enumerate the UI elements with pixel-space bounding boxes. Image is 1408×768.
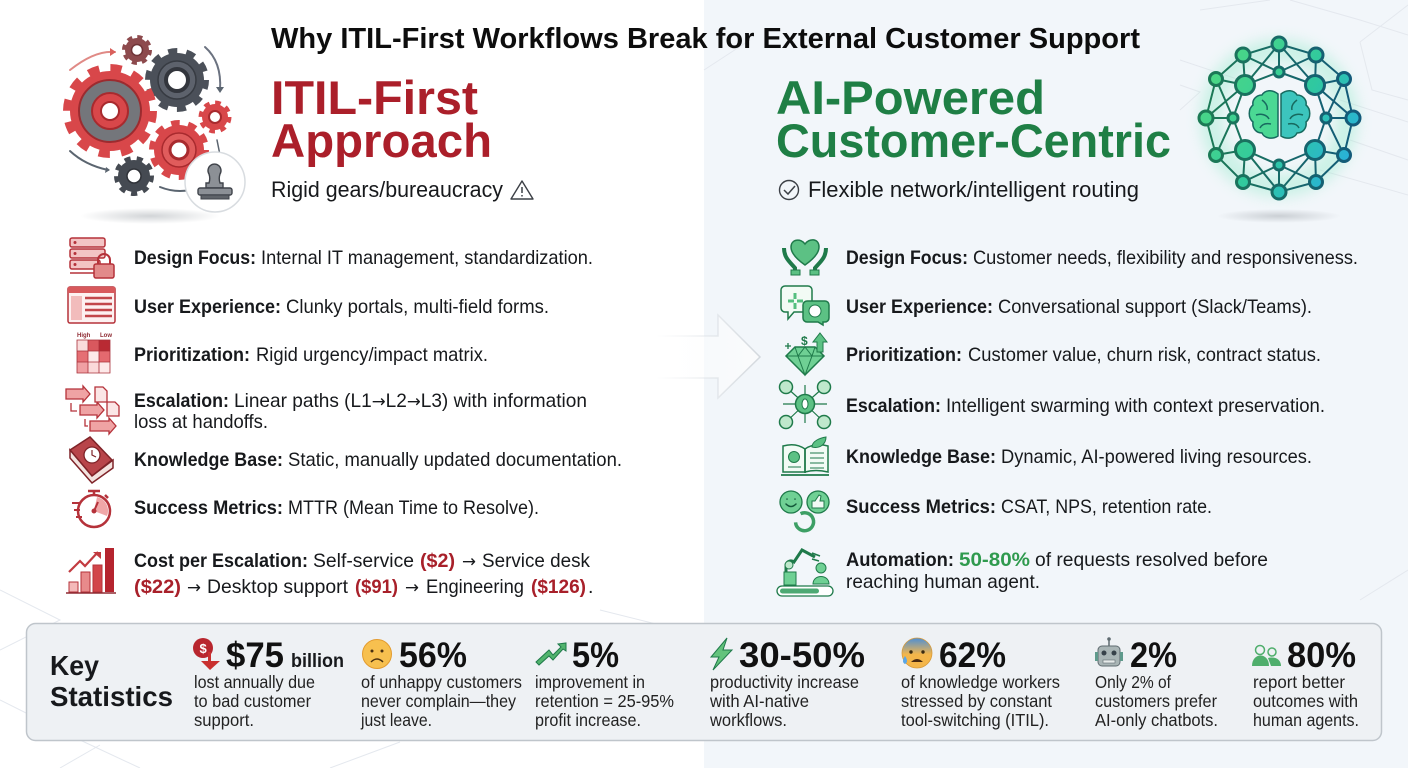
icon: chat bubbles	[781, 286, 829, 325]
text: User Experience:	[846, 296, 993, 318]
stat: 62 percent	[901, 635, 1060, 730]
row: design focus	[70, 238, 593, 278]
arrow: ITIL to AI transition	[655, 315, 760, 398]
description: workflows.	[709, 710, 787, 730]
description: profit increase.	[535, 710, 641, 730]
dark gear	[149, 52, 205, 108]
row: escalation	[66, 386, 587, 434]
brain	[1249, 91, 1310, 138]
text: reaching human agent.	[846, 571, 1040, 593]
text: Dynamic, AI-powered living resources.	[1001, 446, 1312, 468]
text	[134, 247, 593, 269]
row: knowledge base	[70, 437, 622, 483]
text: 50-80%	[959, 549, 1030, 571]
icon: living book	[781, 437, 829, 475]
text	[134, 550, 593, 598]
text	[846, 549, 1268, 593]
small brown gear	[124, 38, 150, 62]
stat: 30-50 percent	[709, 635, 865, 730]
icon: urgency impact matrix: Low	[100, 333, 112, 339]
heading: ITIL-First Approach: ITIL-First	[271, 71, 478, 124]
icon: robot arm and conveyor	[777, 550, 833, 596]
text: Design Focus:	[846, 247, 968, 269]
heading: AI-Powered Customer-Centric: AI-Powered	[776, 71, 1045, 124]
description: tool-switching (ITIL).	[901, 710, 1049, 730]
stat: 75 billion lost	[193, 635, 344, 730]
text: →	[187, 578, 201, 598]
icon: server with lock	[70, 238, 114, 278]
heading: key statistics: Statistics	[50, 681, 173, 712]
description: improvement in	[535, 672, 645, 692]
description: just leave.	[360, 710, 432, 730]
subheading: flexible network: Flexible network/intelligent routing	[808, 177, 1139, 202]
illustration: network and brain	[1199, 37, 1360, 223]
text: ($22)	[134, 576, 181, 598]
stamp badge	[185, 152, 245, 212]
text: ($91)	[355, 576, 398, 598]
description: support.	[194, 710, 254, 730]
row: success metrics	[780, 491, 1212, 534]
text: Automation:	[846, 549, 954, 571]
icon: robot	[1095, 637, 1123, 666]
row: user experience	[781, 286, 1312, 325]
text: Knowledge Base:	[846, 446, 996, 468]
description	[535, 672, 674, 730]
stat: 80 percent	[1252, 635, 1359, 730]
heading: AI-Powered Customer-Centric: Customer-Centric	[776, 114, 1171, 167]
small dark gear	[117, 159, 151, 193]
text: Prioritization:	[134, 344, 250, 366]
value: 56%	[399, 635, 467, 675]
text: Cost per Escalation:	[134, 550, 308, 572]
icon: linear escalation arrows	[66, 386, 119, 434]
row: cost per escalation	[66, 548, 593, 598]
panel: AI-powered customer-centric	[776, 37, 1360, 596]
text: Conversational support (Slack/Teams).	[998, 296, 1312, 318]
icon: diamond with upward arrow: $	[801, 334, 808, 348]
text: Desktop support	[207, 576, 349, 598]
value: billion	[291, 650, 344, 672]
text: ($126)	[531, 576, 586, 598]
background: left white panel	[0, 0, 704, 768]
description	[901, 672, 1060, 730]
small red gear	[201, 103, 229, 131]
text: Intelligent swarming with context preservation.	[946, 395, 1325, 417]
text: Escalation:	[846, 395, 941, 417]
text: Success Metrics:	[134, 497, 283, 519]
text: Customer needs, flexibility and responsiveness.	[973, 247, 1358, 269]
row: prioritization	[77, 333, 488, 373]
subheading: rigid gears: Rigid gears/bureaucracy	[271, 177, 503, 202]
description: AI-only chatbots.	[1095, 710, 1218, 730]
text: Service desk	[482, 550, 590, 572]
heading: key statistics	[50, 650, 173, 712]
icon: rising cost bars	[66, 548, 116, 593]
stat: 5 percent	[535, 635, 674, 730]
row: user experience	[68, 287, 549, 323]
text	[846, 296, 1312, 318]
text: Internal IT management, standardization.	[261, 247, 593, 269]
description	[360, 672, 522, 730]
text: Escalation:	[134, 390, 229, 412]
text: →	[462, 552, 476, 572]
description: human agents.	[1253, 710, 1359, 730]
text: Prioritization:	[846, 344, 962, 366]
value: 80%	[1287, 635, 1356, 675]
icon: sad face	[362, 640, 392, 668]
heading: ITIL-First Approach	[271, 71, 492, 167]
text: loss at handoffs.	[134, 411, 268, 433]
icon: clunky form	[68, 287, 115, 323]
icon: lightning bolt	[711, 638, 732, 670]
icon: falling money: $	[200, 641, 208, 656]
value: $75	[226, 635, 284, 675]
description: lost annually due	[194, 672, 315, 692]
text	[846, 446, 1312, 468]
text: .	[588, 576, 593, 598]
text	[134, 296, 549, 318]
text: Linear paths (L1→L2→L3) with information	[234, 390, 587, 412]
text: →	[405, 578, 419, 598]
text: Design Focus:	[134, 247, 256, 269]
text: User Experience:	[134, 296, 281, 318]
stat: 56 percent	[360, 635, 522, 730]
panel: key statistics	[26, 624, 1382, 740]
text	[846, 496, 1212, 518]
stat: 2 percent	[1095, 635, 1218, 730]
description	[1095, 672, 1218, 730]
text	[134, 344, 488, 366]
text	[134, 449, 622, 471]
text: Success Metrics:	[846, 496, 996, 518]
icon: smile thumb and retention	[780, 491, 829, 534]
row: success metrics	[72, 491, 539, 527]
icon: falling money	[193, 638, 220, 670]
value	[226, 635, 344, 675]
description: report better	[1253, 672, 1345, 692]
icon: people	[1252, 646, 1281, 666]
value: 62%	[939, 635, 1006, 675]
background: right tinted panel	[704, 0, 1408, 768]
description: to bad customer	[194, 691, 311, 711]
description: stressed by constant	[901, 691, 1052, 711]
text: Static, manually updated documentation.	[288, 449, 622, 471]
description: retention = 25-95%	[535, 691, 674, 711]
row: automation	[777, 549, 1268, 596]
value: 30-50%	[739, 635, 865, 675]
description: productivity increase	[710, 672, 859, 692]
mid red gear	[153, 124, 205, 176]
text: CSAT, NPS, retention rate.	[1001, 496, 1212, 518]
heading: key statistics: Key	[50, 650, 99, 681]
row: prioritization	[785, 333, 1321, 375]
icon: anxious face	[902, 638, 932, 668]
description	[1253, 672, 1359, 730]
text: Rigid urgency/impact matrix.	[256, 344, 488, 366]
row: design focus	[784, 240, 1358, 275]
description: of unhappy customers	[361, 672, 522, 692]
row: knowledge base	[781, 437, 1312, 475]
description: customers prefer	[1095, 691, 1217, 711]
icon: stopwatch	[72, 491, 110, 527]
icon: intelligent swarming	[780, 380, 830, 428]
icon: green trend arrow	[536, 643, 566, 665]
heading: ITIL-First Approach: Approach	[271, 114, 492, 167]
description: never complain—they	[361, 691, 516, 711]
main red gear	[68, 69, 152, 153]
text: ($2)	[420, 550, 455, 572]
text: Customer value, churn risk, contract status.	[968, 344, 1321, 366]
icon: static manual book	[70, 437, 113, 483]
description: Only 2% of	[1095, 672, 1171, 692]
description	[194, 672, 315, 730]
text: Engineering	[426, 576, 524, 598]
description: outcomes with	[1253, 691, 1358, 711]
illustration: rigid gears and stamp	[68, 38, 245, 224]
description: with AI-native	[709, 691, 809, 711]
text: Clunky portals, multi-field forms.	[286, 296, 549, 318]
row: escalation	[780, 380, 1325, 428]
text	[134, 497, 539, 519]
text: MTTR (Mean Time to Resolve).	[288, 497, 539, 519]
icon: diamond with upward arrow	[785, 333, 827, 375]
panel: ITIL-First approach	[66, 38, 622, 598]
value: 5%	[572, 635, 619, 675]
description: of knowledge workers	[901, 672, 1060, 692]
description	[709, 672, 859, 730]
text	[134, 390, 587, 433]
icon: hands holding heart	[784, 240, 826, 275]
icon: urgency impact matrix: High	[77, 333, 91, 339]
text: Knowledge Base:	[134, 449, 283, 471]
value: 2%	[1130, 635, 1177, 675]
text: of requests resolved before	[1035, 549, 1268, 571]
heading: AI-Powered Customer-Centric	[776, 71, 1171, 167]
text: Self-service	[313, 550, 414, 572]
title: Why ITIL-First Workflows Break for External Customer Support	[271, 23, 1141, 55]
icon: urgency impact matrix	[77, 333, 112, 373]
